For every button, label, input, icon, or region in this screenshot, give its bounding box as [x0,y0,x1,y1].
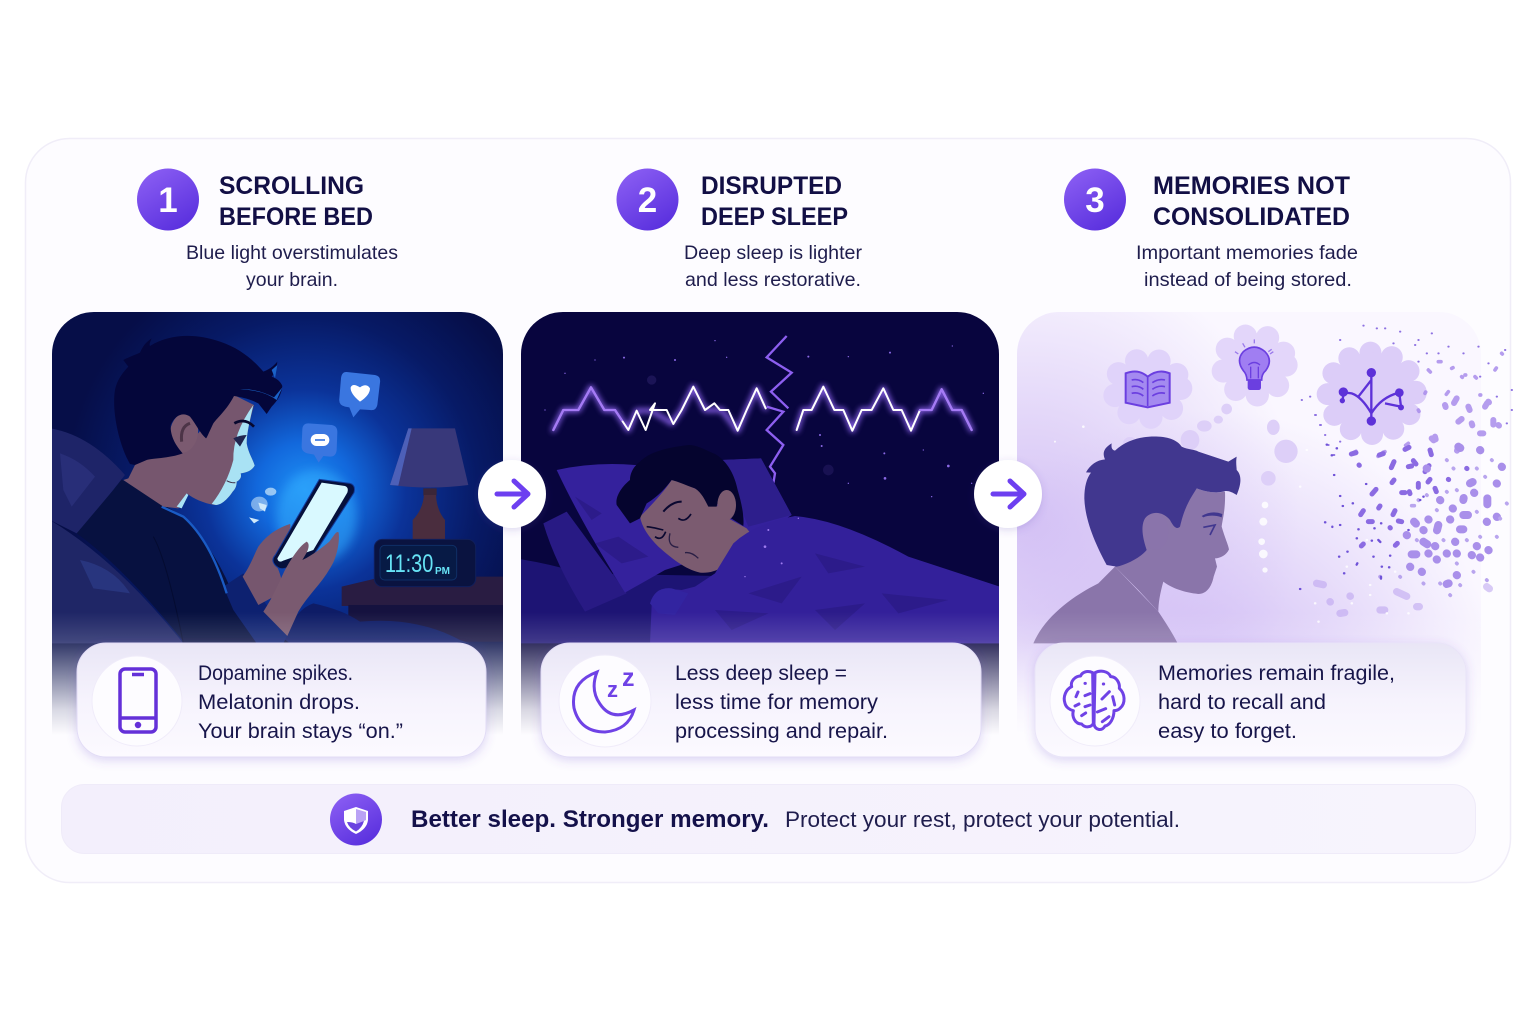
phone glow [277,470,357,563]
heading: memories not consolidated: MEMORIES NOT [1153,172,1350,200]
heading: scrolling before bed: BEFORE BED [219,203,373,231]
icon: moon with zzz [573,664,634,732]
dissolving particles, upper [1302,326,1512,456]
subheading 2 [684,242,863,291]
callout 1 text: Dopamine spikes. [198,662,353,685]
phone [273,479,354,569]
stars [544,340,984,497]
callout 1 text [198,662,403,743]
blanket [283,603,470,643]
bed [521,559,711,644]
panel: illustration of man scrolling phone in bed [50,312,503,762]
icon: brain [1064,671,1124,729]
number badge 3: 3 [1085,181,1105,220]
dissolving particles, lower [1300,445,1507,622]
panel: illustration of disrupted sleep [515,312,1002,762]
icon: phone [120,669,156,732]
face [123,395,255,508]
callout 3 [1035,643,1466,757]
heading: memories not consolidated: CONSOLIDATED [1153,203,1350,231]
callout 3 text: Memories remain fragile, [1158,662,1395,685]
subheading 3: Important memories fade [1136,242,1358,264]
holding hand [263,532,339,636]
brain wave glow [553,387,972,431]
lightning crack [767,336,792,483]
thought cloud: book [1114,359,1181,417]
bottom banner [62,784,1476,854]
heading: scrolling before bed: SCROLLING [219,172,364,200]
hand [650,588,676,606]
nightstand [342,577,503,642]
sleeping face and neck [640,480,753,573]
ear [170,414,198,451]
alarm clock: PM [435,566,450,577]
panel: outer card [26,138,1510,882]
panel: illustration of fading memories [1017,312,1513,704]
alarm clock: 11:30 [385,551,433,578]
man in profile: shoulders [1033,567,1178,643]
pillows [543,458,792,612]
callout 2 text [675,662,888,743]
man face [1115,488,1229,612]
callout 3 text: hard to recall and [1158,691,1326,714]
hair [616,445,744,526]
brain wave line [553,387,972,431]
number badge 2 [616,168,678,230]
notification bubble: heart [339,372,380,417]
callout 1 text: Your brain stays “on.” [198,720,403,743]
callout 2 text: processing and repair. [675,720,888,743]
callout 1 text: Melatonin drops. [198,691,360,714]
bottom fade [1017,612,1505,762]
step 3 header [1064,168,1358,291]
blanket [650,516,1000,643]
callout 1 [77,643,486,757]
callout 3 text: easy to forget. [1158,720,1297,743]
icon: moon with zzz: z [622,664,634,692]
banner text: Protect your rest, protect your potential. [785,807,1180,832]
bottom fade [521,619,999,745]
banner text: Better sleep. Stronger memory. [411,806,769,833]
heading: scrolling before bed [219,172,373,231]
subheading 2: and less restorative. [685,269,861,291]
notification bubble: link [302,423,337,463]
number badge 2: 2 [638,181,657,220]
broken notification fragments [249,488,276,523]
subheading 1 [186,242,398,291]
pillows [50,428,183,643]
thought bubbles [1123,404,1298,486]
man eye and brow [1202,512,1222,535]
heading: disrupted deep sleep: DISRUPTED [701,172,842,200]
bedside lamp [390,428,468,540]
sparkles [1054,425,1268,573]
thought cloud: light bulb [1223,335,1286,395]
step 1 header [137,168,398,291]
heading: memories not consolidated [1153,172,1350,231]
subheading 1: Blue light overstimulates [186,242,398,264]
number badge 3 [1064,168,1126,230]
arrow 2 [974,460,1042,528]
subheading 2: Deep sleep is lighter [684,242,863,264]
subheading 1: your brain. [246,269,338,291]
arrow 1 [478,460,546,528]
ear [717,490,736,520]
bottom fade [52,618,503,745]
callout 3 text [1158,662,1395,743]
alarm clock [374,539,476,587]
hair [114,336,282,465]
banner text [411,806,1180,833]
step 2 header [616,168,863,291]
callout 2 text: less time for memory [675,691,879,714]
subheading 3 [1136,242,1358,291]
subheading 3: instead of being stored. [1144,269,1352,291]
man body [77,479,290,643]
number badge 1 [137,168,199,230]
man ear [1143,513,1168,550]
number badge 1: 1 [158,181,178,220]
icon: moon with zzz: z [607,677,618,702]
heading: disrupted deep sleep [701,172,848,231]
heading: disrupted deep sleep: DEEP SLEEP [701,203,848,231]
man hair [1084,437,1240,567]
callout 2 text: Less deep sleep = [675,662,847,685]
left hand [243,524,290,605]
icon: shield [330,794,382,846]
thought cloud: network [1328,353,1416,434]
callout 2 [541,643,981,757]
